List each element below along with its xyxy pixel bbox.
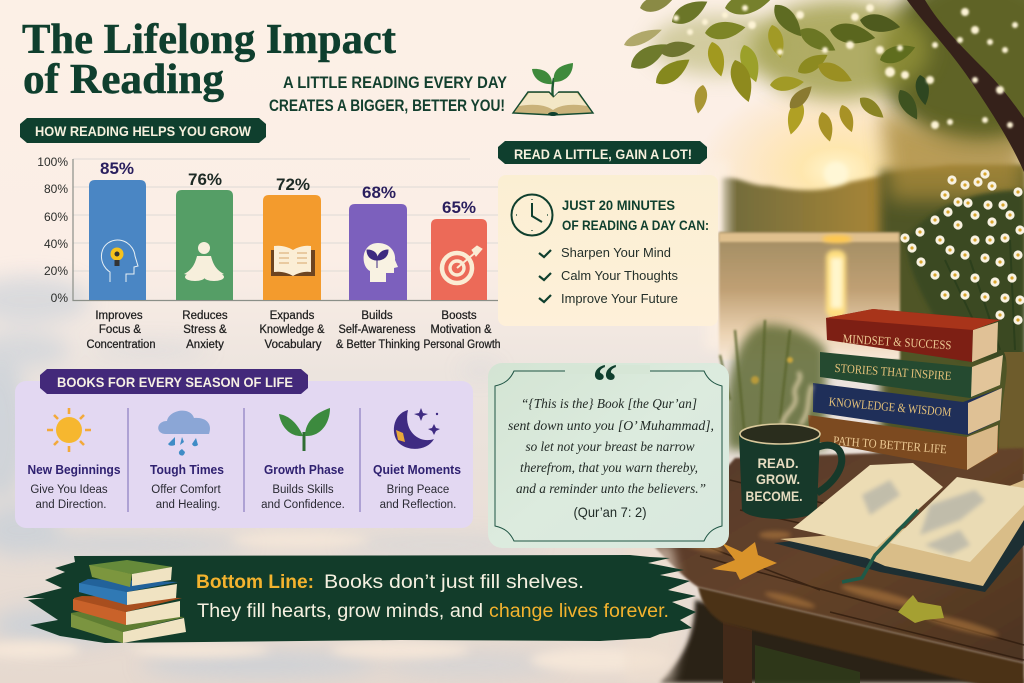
- book: path to better life: [808, 415, 998, 470]
- bar: reduces stress 76%: [176, 170, 233, 351]
- column: growth phase: Growth Phase: [264, 462, 344, 477]
- label: improves focus: Focus &: [99, 324, 141, 336]
- label: reduces stress: Anxiety: [186, 339, 224, 351]
- label: improves focus: [86, 310, 156, 351]
- dark foliage behind flowers: [880, 170, 1024, 470]
- label: builds self-awareness: & Better Thinking: [336, 339, 420, 351]
- icon: open book: [271, 246, 315, 276]
- bar: reduces stress 76%: 76%: [188, 170, 222, 189]
- blue book: [79, 579, 178, 605]
- banner: bottom line: [23, 555, 696, 643]
- column: quiet moments: [373, 408, 461, 511]
- bar: expands knowledge 72%: 72%: [276, 175, 310, 194]
- book: knowledge and wisdom: KNOWLEDGE & WISDOM: [828, 395, 952, 419]
- label: improves focus: Concentration: [86, 339, 156, 351]
- column: new beginnings: [28, 408, 120, 511]
- quote text: [508, 396, 714, 496]
- sun reflection: [822, 235, 852, 318]
- leaves: [622, 0, 932, 143]
- checklist: Calm Your Thoughts: [561, 268, 678, 283]
- mug: BECOME.: [746, 488, 802, 504]
- top green book: [89, 560, 173, 587]
- orange book: [73, 596, 182, 625]
- y axis and gridlines: [37, 155, 498, 305]
- icon: clock: [512, 194, 552, 236]
- column: growth phase: Builds Skills: [272, 484, 334, 496]
- maple leaf: [712, 542, 777, 580]
- subtitle: A LITTLE READING EVERY DAY: [283, 73, 508, 92]
- column: new beginnings: New Beginnings: [28, 462, 120, 477]
- heading: [562, 197, 709, 233]
- label: boosts motivation: [424, 310, 500, 351]
- book: mindset and success: [826, 309, 1000, 362]
- label: expands knowledge: Expands: [270, 310, 315, 322]
- icon: rain cloud: [158, 411, 210, 456]
- label: boosts motivation: Boosts: [441, 310, 477, 322]
- heading pill: BOOKS FOR EVERY SEASON OF LIFE: [57, 374, 293, 390]
- mug: READ.: [758, 455, 798, 471]
- heading pill: read a little: [498, 141, 707, 164]
- icon: quote marks: “: [592, 353, 618, 409]
- title: [22, 17, 396, 103]
- label: improves focus: Improves: [95, 310, 143, 322]
- icon: target with arrow: [442, 246, 482, 283]
- heading pill: how reading helps you grow: HOW READING HELPS YOU GROW: [35, 123, 252, 139]
- icon: stack of books: [71, 560, 186, 643]
- bookmark ribbon: [842, 510, 918, 582]
- y axis and gridlines: 60%: [44, 210, 68, 224]
- mug: GROW.: [756, 471, 800, 487]
- checklist: Sharpen Your Mind: [561, 245, 671, 260]
- y axis and gridlines: 20%: [44, 264, 68, 278]
- column: new beginnings: and Direction.: [36, 499, 106, 511]
- icon: open book with sprout: [513, 63, 593, 116]
- quote text: therefrom, that you warn thereby,: [520, 460, 698, 475]
- banner text: Books don’t just fill shelves.: [324, 572, 584, 593]
- book: path to better life: PATH TO BETTER LIFE: [833, 434, 948, 456]
- quote text: and a reminder unto the believers.”: [516, 481, 706, 496]
- heading pill: read a little: READ A LITTLE, GAIN A LOT!: [514, 147, 692, 162]
- banner text: change lives forever.: [489, 601, 669, 622]
- panel: twenty minutes: [498, 175, 718, 326]
- heading pill: how reading helps you grow: [20, 118, 266, 143]
- book: stories that inspire: STORIES THAT INSPIRE: [834, 361, 952, 383]
- bar chart: [37, 155, 500, 351]
- title: of Reading: [23, 57, 224, 103]
- y axis and gridlines: 0%: [51, 291, 68, 305]
- panel: quote: [488, 353, 729, 548]
- bar: builds self-awareness 68%: 68%: [362, 183, 396, 202]
- bokeh: [673, 4, 1018, 129]
- label: reduces stress: Stress &: [183, 324, 227, 336]
- icon: head with lightbulb: [101, 240, 138, 282]
- bar: expands knowledge 72%: [260, 175, 325, 351]
- column: tough times: [150, 411, 224, 511]
- label: expands knowledge: [260, 310, 325, 351]
- subtitle: [269, 73, 508, 115]
- icon: meditating person: [184, 242, 224, 281]
- reeds: [720, 320, 826, 450]
- banner text: [196, 572, 669, 622]
- label: builds self-awareness: [336, 310, 420, 351]
- checklist: Improve Your Future: [561, 291, 678, 306]
- icon: moon and stars: [394, 408, 440, 449]
- bottom green book: [71, 612, 186, 643]
- y axis and gridlines: 100%: [37, 155, 68, 169]
- lake: [719, 232, 900, 360]
- title: The Lifelong Impact: [22, 17, 396, 63]
- y axis and gridlines: 40%: [44, 237, 68, 251]
- bar: improves focus 85%: [86, 159, 156, 351]
- stack of titled books: [808, 309, 1003, 470]
- heading: OF READING A DAY CAN:: [562, 217, 709, 233]
- heading: JUST 20 MINUTES: [562, 197, 675, 213]
- steam: [783, 372, 812, 432]
- sun glow: [696, 80, 976, 260]
- icon: head with sprout: [364, 243, 398, 282]
- column: quiet moments: and Reflection.: [380, 499, 456, 511]
- mug: [739, 424, 842, 519]
- book: mindset and success: MINDSET & SUCCESS: [842, 332, 952, 352]
- heading pill: [40, 369, 308, 394]
- tree trunk: [907, 0, 1024, 172]
- label: builds self-awareness: Builds: [361, 310, 393, 322]
- column: tough times: and Healing.: [156, 499, 220, 511]
- label: builds self-awareness: Self-Awareness: [338, 324, 416, 336]
- y axis and gridlines: 80%: [44, 182, 68, 196]
- bar: boosts motivation 65%: [424, 198, 500, 351]
- column: growth phase: and Confidence.: [261, 499, 345, 511]
- book: stories that inspire: [820, 352, 1003, 398]
- vase: [999, 352, 1024, 474]
- column: quiet moments: Quiet Moments: [373, 462, 461, 477]
- quote text: so let not your breast be narrow: [526, 439, 695, 454]
- small yellow leaf: [898, 595, 944, 623]
- checklist: [539, 245, 678, 306]
- quote reference: (Qur’an 7: 2): [574, 504, 646, 520]
- banner text: Bottom Line:: [196, 572, 314, 593]
- column: tough times: Offer Comfort: [151, 484, 222, 496]
- label: boosts motivation: Personal Growth: [424, 339, 500, 351]
- panel: books for every season: [15, 369, 473, 528]
- label: reduces stress: Reduces: [182, 310, 228, 322]
- distant hills: [722, 165, 1024, 300]
- quote text: “{This is the} Book [the Qur’an]: [521, 396, 697, 411]
- label: expands knowledge: Knowledge &: [260, 324, 325, 336]
- label: boosts motivation: Motivation &: [430, 324, 492, 336]
- bar: builds self-awareness 68%: [336, 183, 420, 351]
- icon: sprout: [279, 408, 330, 451]
- column: quiet moments: Bring Peace: [387, 484, 449, 496]
- icon: sun: [47, 408, 91, 452]
- wildflowers: [900, 169, 1024, 360]
- label: reduces stress: [182, 310, 228, 351]
- tree canopy: [622, 0, 1024, 200]
- column: growth phase: [261, 408, 345, 511]
- subtitle: CREATES A BIGGER, BETTER YOU!: [269, 96, 505, 115]
- column: tough times: Tough Times: [150, 462, 224, 477]
- open book: [774, 463, 1024, 592]
- bar: improves focus 85%: 85%: [100, 159, 134, 178]
- dark area under table: [660, 600, 1024, 683]
- wooden table: [655, 448, 1024, 683]
- banner text: They fill hearts, grow minds, and: [197, 601, 483, 622]
- quote text: sent down unto you [O’ Muhammad],: [508, 418, 714, 433]
- left fade of lower table: [625, 545, 682, 683]
- label: expands knowledge: Vocabulary: [265, 339, 322, 351]
- bar: boosts motivation 65%: 65%: [442, 198, 476, 217]
- photo: lakeside sunset scene: [622, 0, 1024, 683]
- column: new beginnings: Give You Ideas: [30, 484, 108, 496]
- book: knowledge and wisdom: [813, 383, 1002, 435]
